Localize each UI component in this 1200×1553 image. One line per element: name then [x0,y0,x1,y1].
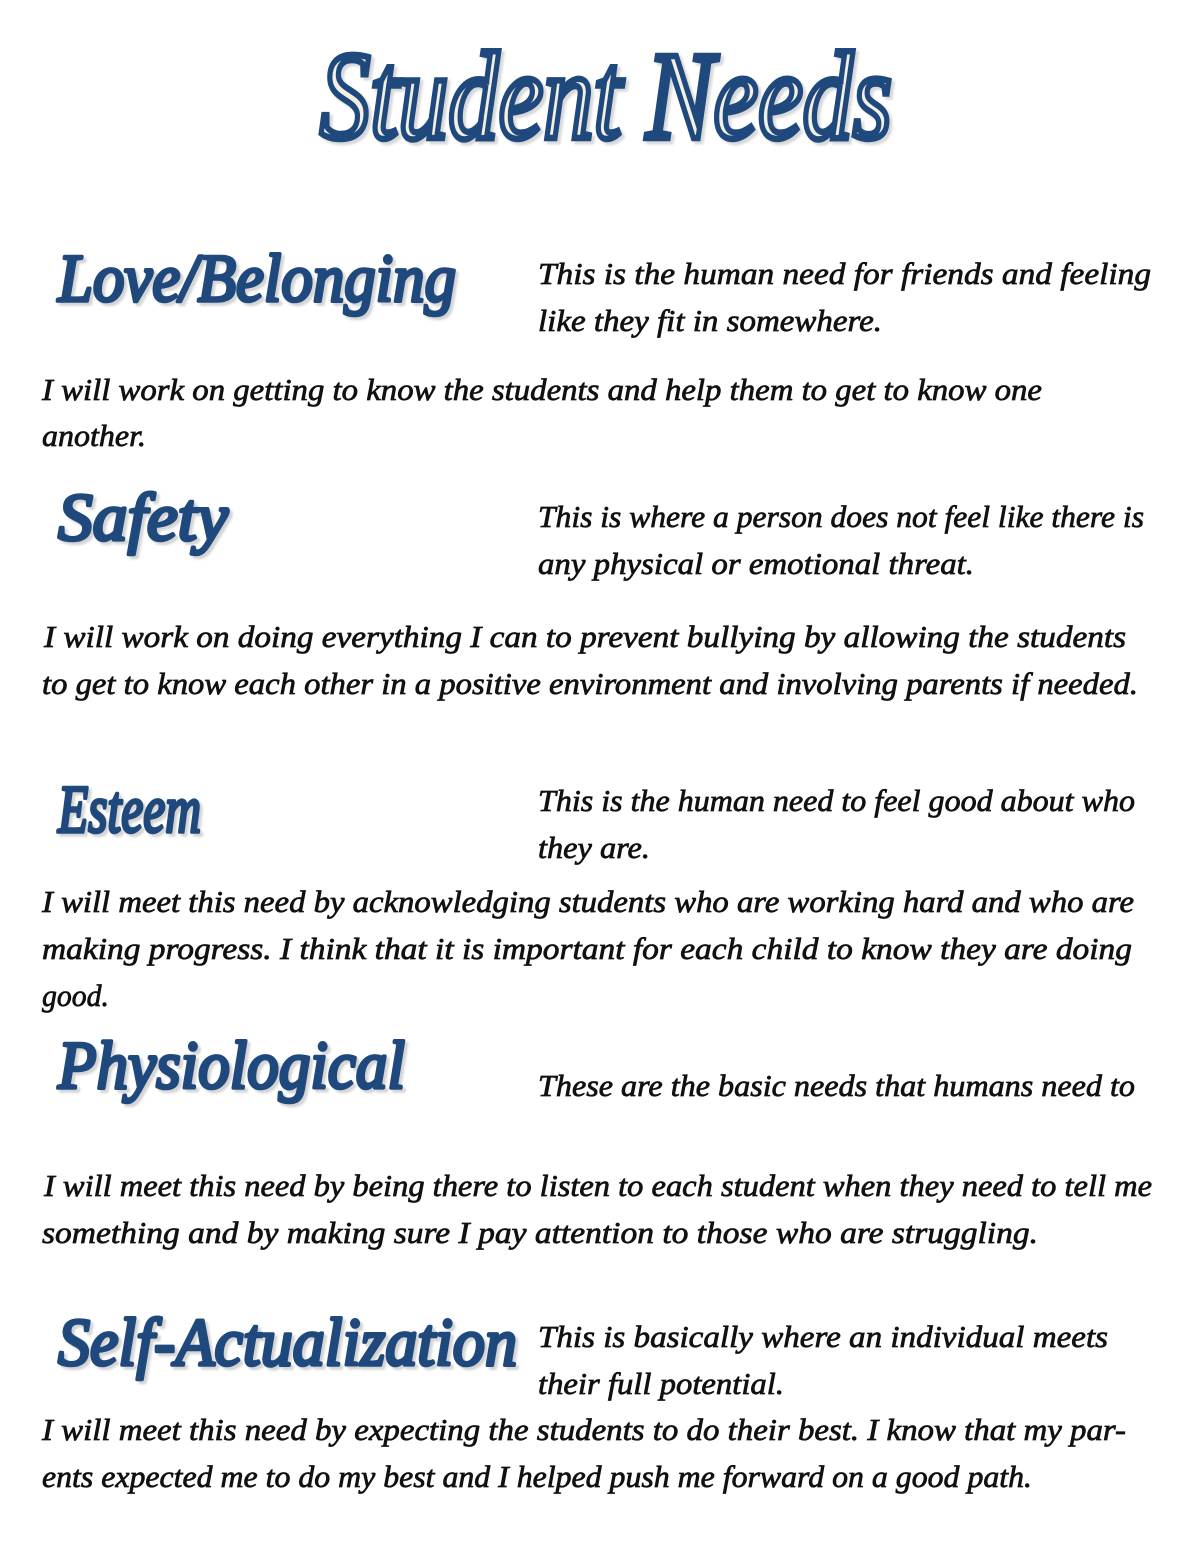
plan: Love/Belonging: another. [42,418,146,453]
definition: Esteem: they are. [538,830,650,865]
definition: Love/Belonging: This is the human need for friends and feeling [538,256,1151,291]
plan: Physiological: I will meet this need by being there to listen to each student when they need to tell me [43,1168,1152,1203]
definition: Self-Actualization: their full potential. [538,1366,784,1401]
plan: Physiological: something and by making sure I pay attention to those who are struggling. [42,1215,1038,1250]
section: Safety [42,479,1144,701]
definition: Safety: This is where a person does not feel like there is [538,499,1144,534]
definition: Esteem: This is the human need to feel good about who [538,783,1135,818]
section: Esteem [41,771,1135,1013]
section: Physiological [42,1027,1152,1250]
heading: Physiological: Physiological [57,1027,405,1103]
plan: Esteem: I will meet this need by acknowledging students who are working hard and who are [41,884,1134,919]
definition: Love/Belonging [538,256,1151,338]
definition: Esteem [538,783,1135,865]
plan: Love/Belonging [41,372,1042,453]
plan: Esteem [41,884,1134,1013]
definition: Safety: any physical or emotional threat. [538,546,974,581]
plan: Self-Actualization: I will meet this need by expecting the students to do their best. I know that my par- [41,1412,1126,1447]
definition: Self-Actualization [538,1319,1108,1401]
plan: Esteem: making progress. I think that it is important for each child to know they are doing [42,931,1132,966]
definition: Safety [538,499,1144,581]
section: Self-Actualization [41,1304,1126,1494]
heading: Safety: Safety [58,479,229,555]
plan: Physiological [42,1168,1152,1250]
plan: Self-Actualization [41,1412,1126,1494]
definition: Self-Actualization: This is basically where an individual meets [538,1319,1108,1354]
plan: Esteem: good. [42,978,109,1013]
plan: Safety [42,619,1138,701]
definition: Physiological: These are the basic needs that humans need to [538,1068,1135,1103]
plan: Safety: I will work on doing everything I can to prevent bullying by allowing the students [43,619,1126,654]
plan: Safety: to get to know each other in a positive environment and involving parents if needed. [42,666,1138,701]
title: Student Needs [320,28,892,166]
plan: Self-Actualization: ents expected me to do my best and I helped push me forward on a good path. [42,1459,1032,1494]
heading: Self-Actualization: Self-Actualization [58,1304,517,1380]
plan: Love/Belonging: I will work on getting to know the students and help them to get to know one [41,372,1042,407]
heading: Esteem: Esteem [57,771,201,847]
section: Love/Belonging [41,240,1151,453]
heading: Love/Belonging: Love/Belonging [57,240,456,316]
definition: Love/Belonging: like they fit in somewhere. [538,303,882,338]
